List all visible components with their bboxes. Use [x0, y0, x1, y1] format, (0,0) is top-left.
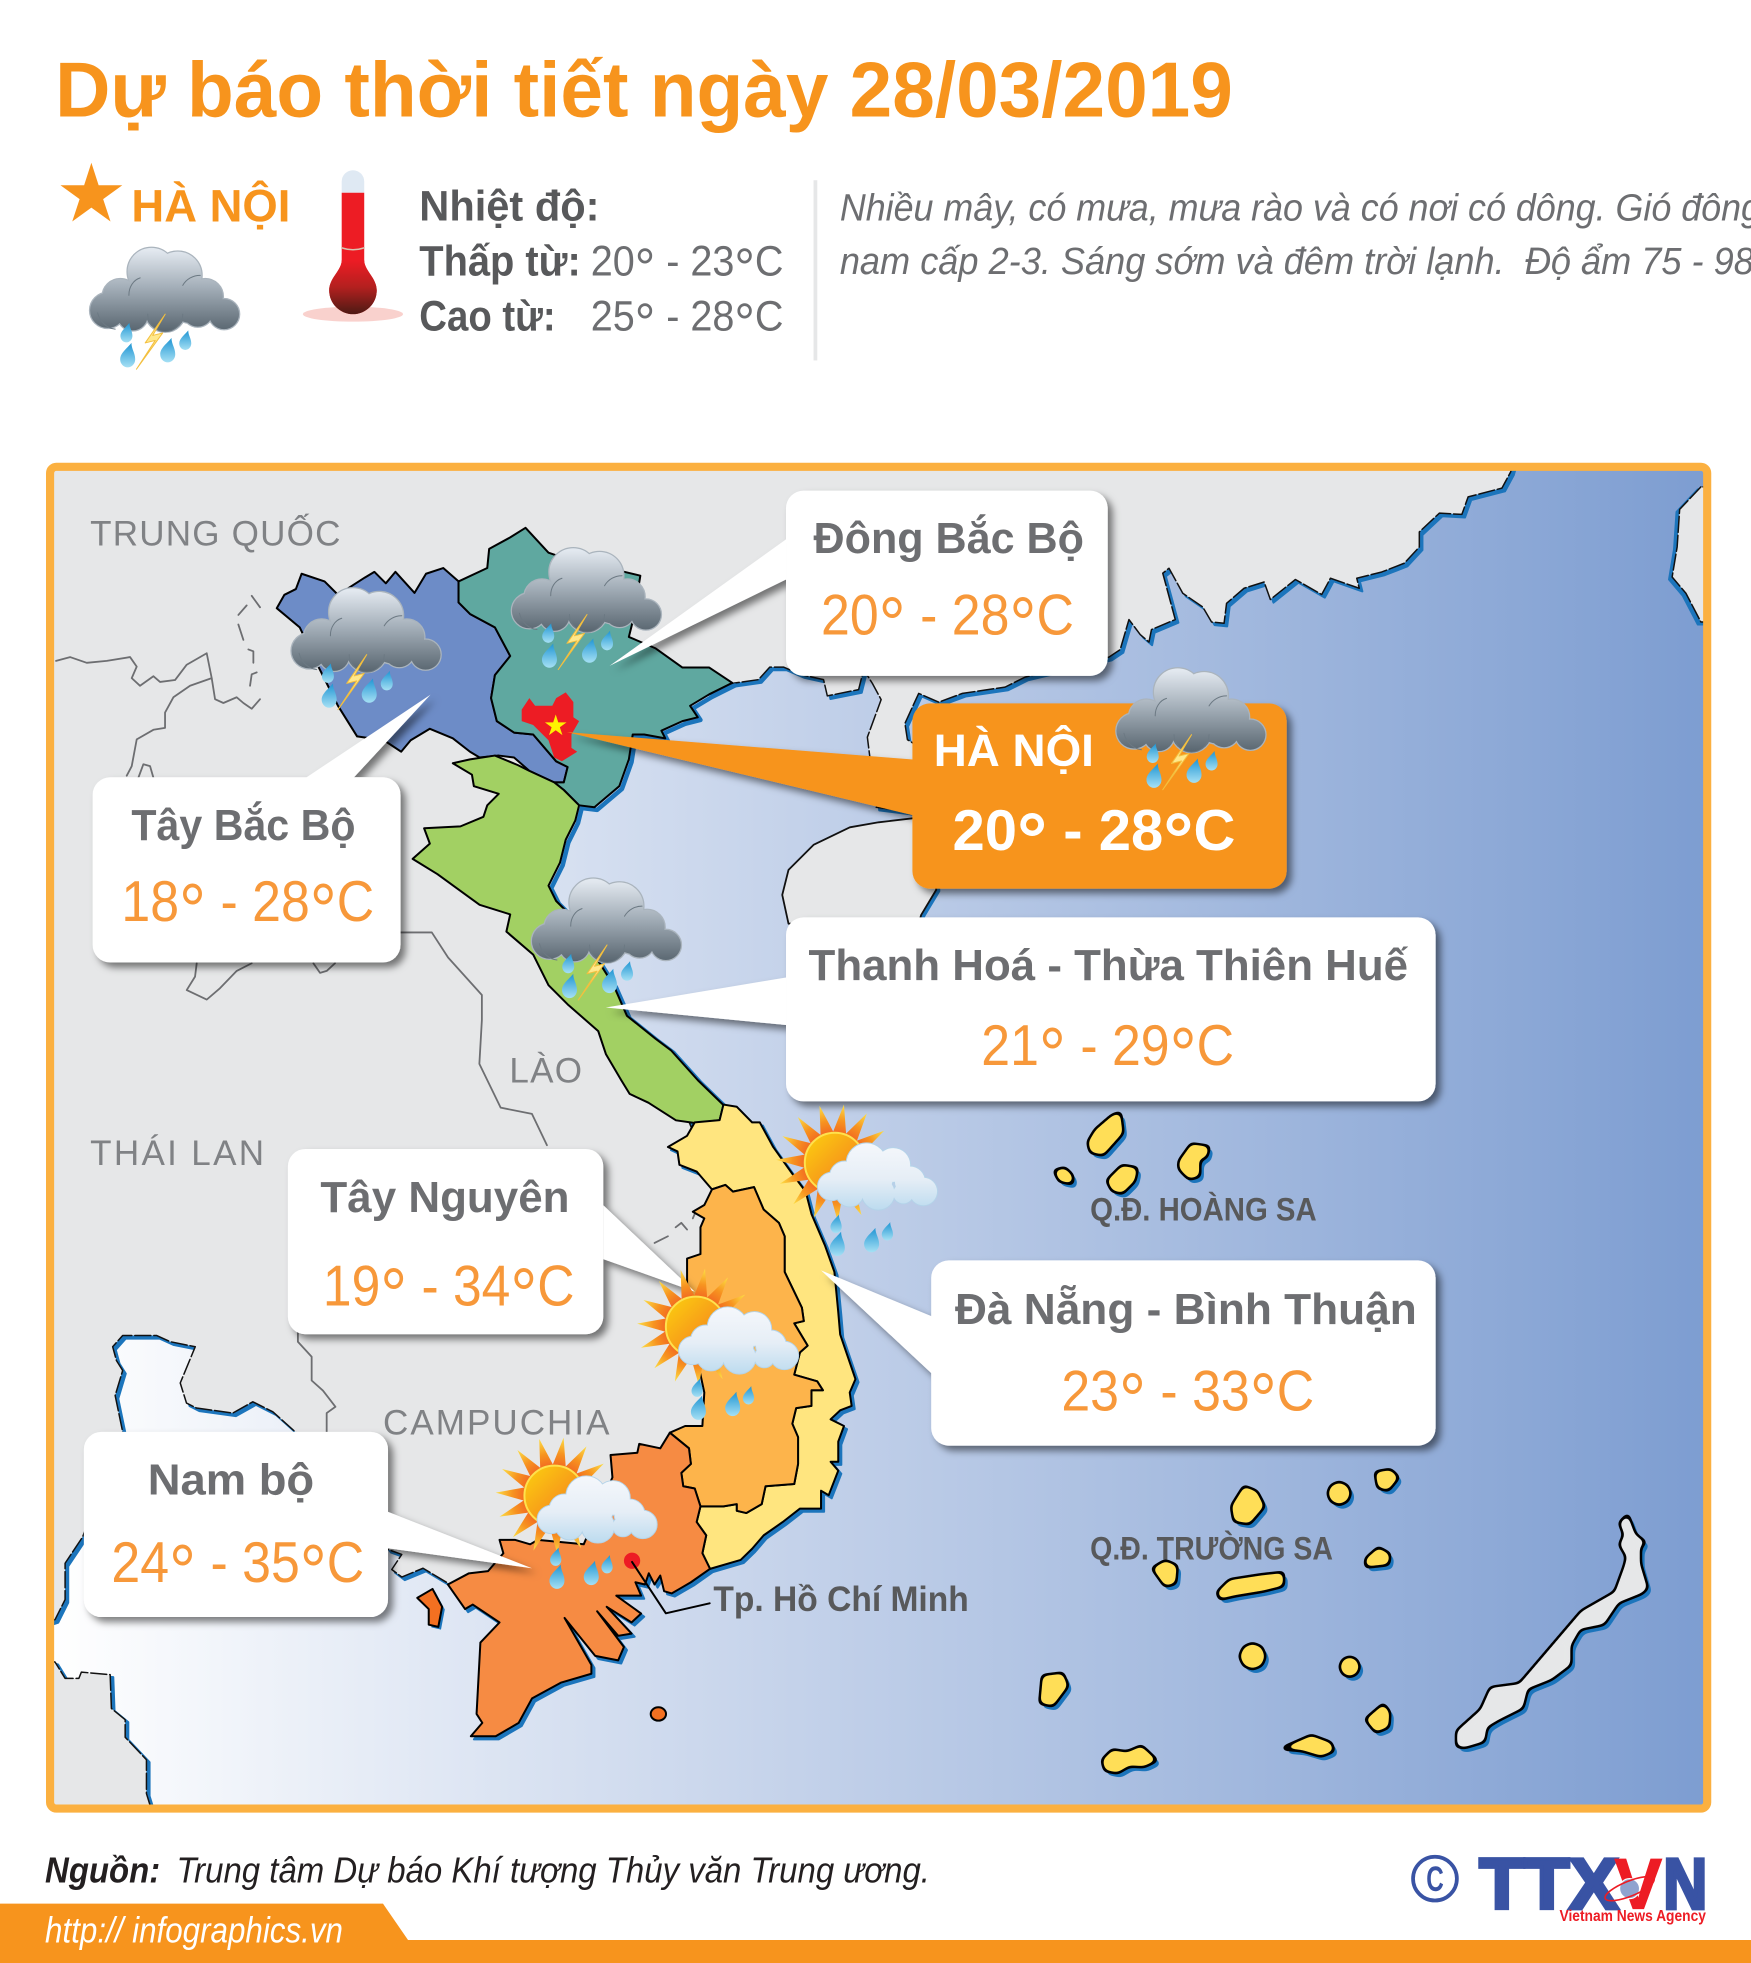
island labels: Q.Đ. TRƯỜNG SA — [1090, 1529, 1333, 1566]
copyright mark: C — [1426, 1860, 1444, 1899]
temperature text: 25 — [591, 292, 638, 340]
southern Vietnam regions — [417, 1105, 859, 1739]
icon: storm over Thanh Hoa — [532, 879, 681, 1000]
card: Tay Nguyen: 19 — [323, 1254, 387, 1318]
Ho Chi Minh City marker and leader — [624, 1553, 710, 1613]
card: Thanh Hoa - Thua Thien Hue — [606, 917, 1436, 1101]
card: Hanoi highlight: - 28 — [1047, 799, 1163, 863]
card: Nam Bo: ° — [300, 1529, 327, 1613]
icon: storm over Dong Bac — [512, 548, 661, 670]
card: Da Nang - Binh Thuan: - 33 — [1146, 1360, 1250, 1424]
card: Tay Bac Bo — [93, 695, 431, 962]
logo: TTXVN: Vietnam News Agency — [1559, 1908, 1706, 1925]
card: Thanh Hoa - Thua Thien Hue: Thanh Hoá - Thừa Thiên Huế — [809, 941, 1409, 990]
card: Tay Bac Bo: ° — [310, 868, 337, 952]
temperature text: C — [755, 292, 784, 340]
copyright mark — [1413, 1857, 1457, 1901]
card: Da Nang - Binh Thuan — [821, 1260, 1436, 1446]
island labels — [1090, 1190, 1333, 1566]
panel: map — [48, 463, 1708, 1812]
card: Nam Bo: - 35 — [196, 1531, 300, 1595]
card: Hanoi highlight: HÀ NỘI — [934, 725, 1094, 776]
card: Dong Bac Bo — [610, 491, 1108, 676]
region: Tay Nguyen — [670, 1185, 823, 1513]
region: Dong Bac — [459, 528, 732, 807]
temperature text: ° — [734, 237, 755, 299]
source note: Trung tâm Dự báo Khí tượng Thủy văn Trung ương. — [176, 1849, 930, 1890]
temperature text: C — [755, 237, 784, 285]
description text — [840, 186, 1751, 282]
temperature text: ° — [635, 237, 655, 299]
card: Nam Bo: ° — [169, 1529, 196, 1613]
card: Tay Bac Bo: C — [337, 870, 374, 934]
paracel, spratly islands and Palawan — [1041, 1114, 1650, 1776]
temperature text — [419, 182, 784, 354]
island labels: Q.Đ. HOÀNG SA — [1090, 1190, 1317, 1227]
country labels: CAMPUCHIA — [383, 1403, 610, 1442]
card: Hanoi highlight: 20 — [952, 799, 1017, 863]
logo: TTXVN: TTX — [1479, 1845, 1618, 1925]
source note: Nguồn: — [45, 1849, 160, 1890]
logo: TTXVN: V — [1615, 1845, 1663, 1925]
card: Da Nang - Binh Thuan: Đà Nẵng - Bình Thuận — [955, 1283, 1417, 1334]
card: Nam Bo: 24 — [111, 1531, 175, 1595]
region: Da Nang - Binh Thuan — [668, 1105, 855, 1569]
card: Thanh Hoa - Thua Thien Hue: ° — [1039, 1012, 1066, 1096]
icon: sun and rain over Tay Nguyen — [637, 1269, 798, 1420]
card: Da Nang - Binh Thuan: 23 — [1061, 1360, 1125, 1424]
icon: storm cloud — [90, 248, 239, 369]
footer band — [0, 1904, 1751, 1963]
card: Tay Nguyen: Tây Nguyên — [320, 1173, 569, 1222]
card: Dong Bac Bo: ° — [1009, 582, 1036, 666]
title: Dự báo thời tiết ngày 28/03/2019 — [55, 47, 1233, 133]
card: Dong Bac Bo: - 28 — [906, 584, 1009, 648]
icon: star — [60, 163, 122, 222]
card: Hanoi highlight: ° — [1163, 797, 1193, 881]
card: Da Nang - Binh Thuan: ° — [1119, 1358, 1146, 1442]
temperature text: Thấp từ: — [419, 237, 581, 285]
country labels: THÁI LAN — [90, 1134, 264, 1173]
temperature text: Cao từ: — [419, 292, 556, 340]
temperature text: ° — [635, 292, 655, 354]
label: Ho Chi Minh City: Tp. Hồ Chí Minh — [713, 1580, 969, 1619]
card: Dong Bac Bo: 20 — [821, 584, 885, 648]
card: Thanh Hoa - Thua Thien Hue: - 29 — [1066, 1014, 1170, 1078]
card: Da Nang - Binh Thuan: C — [1277, 1360, 1314, 1424]
card: Nam Bo — [84, 1432, 532, 1617]
icon: sun and rain over Da Nang — [776, 1105, 937, 1256]
country labels — [90, 514, 610, 1442]
temperature text: ° — [734, 292, 755, 354]
card: Tay Nguyen — [288, 1149, 695, 1336]
website link: http:// infographics.vn — [45, 1909, 343, 1950]
card: Nam Bo: Nam bộ — [148, 1455, 314, 1504]
region: Tay Bac — [277, 568, 568, 782]
Hanoi summary block — [60, 163, 1751, 369]
heading: Hanoi: HÀ NỘI — [131, 181, 290, 232]
card: Tay Nguyen: ° — [380, 1252, 407, 1336]
icon: storm over Tay Bac — [292, 588, 441, 710]
card: Dong Bac Bo: Đông Bắc Bộ — [814, 513, 1084, 563]
northern Vietnam regions — [277, 528, 735, 1123]
Hanoi star marker — [545, 715, 567, 735]
card: Hanoi highlight: C — [1193, 799, 1235, 863]
region: Nam Bo — [448, 1433, 710, 1736]
logo: TTXVN: N — [1663, 1845, 1707, 1925]
temperature text: - 23 — [655, 237, 734, 285]
temperature text: 20 — [591, 237, 638, 285]
logo: TTXVN — [1413, 1845, 1707, 1925]
card: Dong Bac Bo: C — [1036, 584, 1074, 648]
card: Tay Bac Bo: ° — [179, 868, 206, 952]
card: Thanh Hoa - Thua Thien Hue: C — [1197, 1014, 1234, 1078]
card: Da Nang - Binh Thuan: ° — [1250, 1358, 1277, 1442]
temperature text: - 28 — [655, 292, 734, 340]
card: Tay Bac Bo: Tây Bắc Bộ — [131, 800, 355, 850]
temperature text: Nhiệt độ: — [419, 182, 600, 230]
country labels: TRUNG QUỐC — [90, 514, 340, 554]
card: Nam Bo: C — [327, 1531, 364, 1595]
card: Tay Nguyen: ° — [510, 1252, 537, 1336]
card: Thanh Hoa - Thua Thien Hue: ° — [1170, 1012, 1197, 1096]
neighbouring land masses — [48, 463, 1708, 1812]
icon: sun and rain over Nam Bo — [496, 1438, 657, 1589]
card: Tay Nguyen: - 34 — [407, 1254, 510, 1318]
card: Tay Bac Bo: - 28 — [206, 870, 310, 934]
region: Thanh Hoa - Hue — [413, 756, 723, 1123]
card: Tay Nguyen: C — [537, 1254, 574, 1318]
card: Thanh Hoa - Thua Thien Hue: 21 — [981, 1014, 1045, 1078]
country labels: LÀO — [509, 1052, 582, 1091]
icon: storm over Hanoi card — [1116, 668, 1265, 790]
region: Hanoi — [522, 692, 579, 761]
icon: thermometer — [303, 170, 403, 322]
card: Tay Bac Bo: 18 — [121, 870, 185, 934]
card: Hanoi highlight — [567, 703, 1287, 889]
national borders — [56, 596, 695, 1432]
card: Hanoi highlight: ° — [1017, 797, 1047, 881]
card: Dong Bac Bo: ° — [879, 582, 906, 666]
